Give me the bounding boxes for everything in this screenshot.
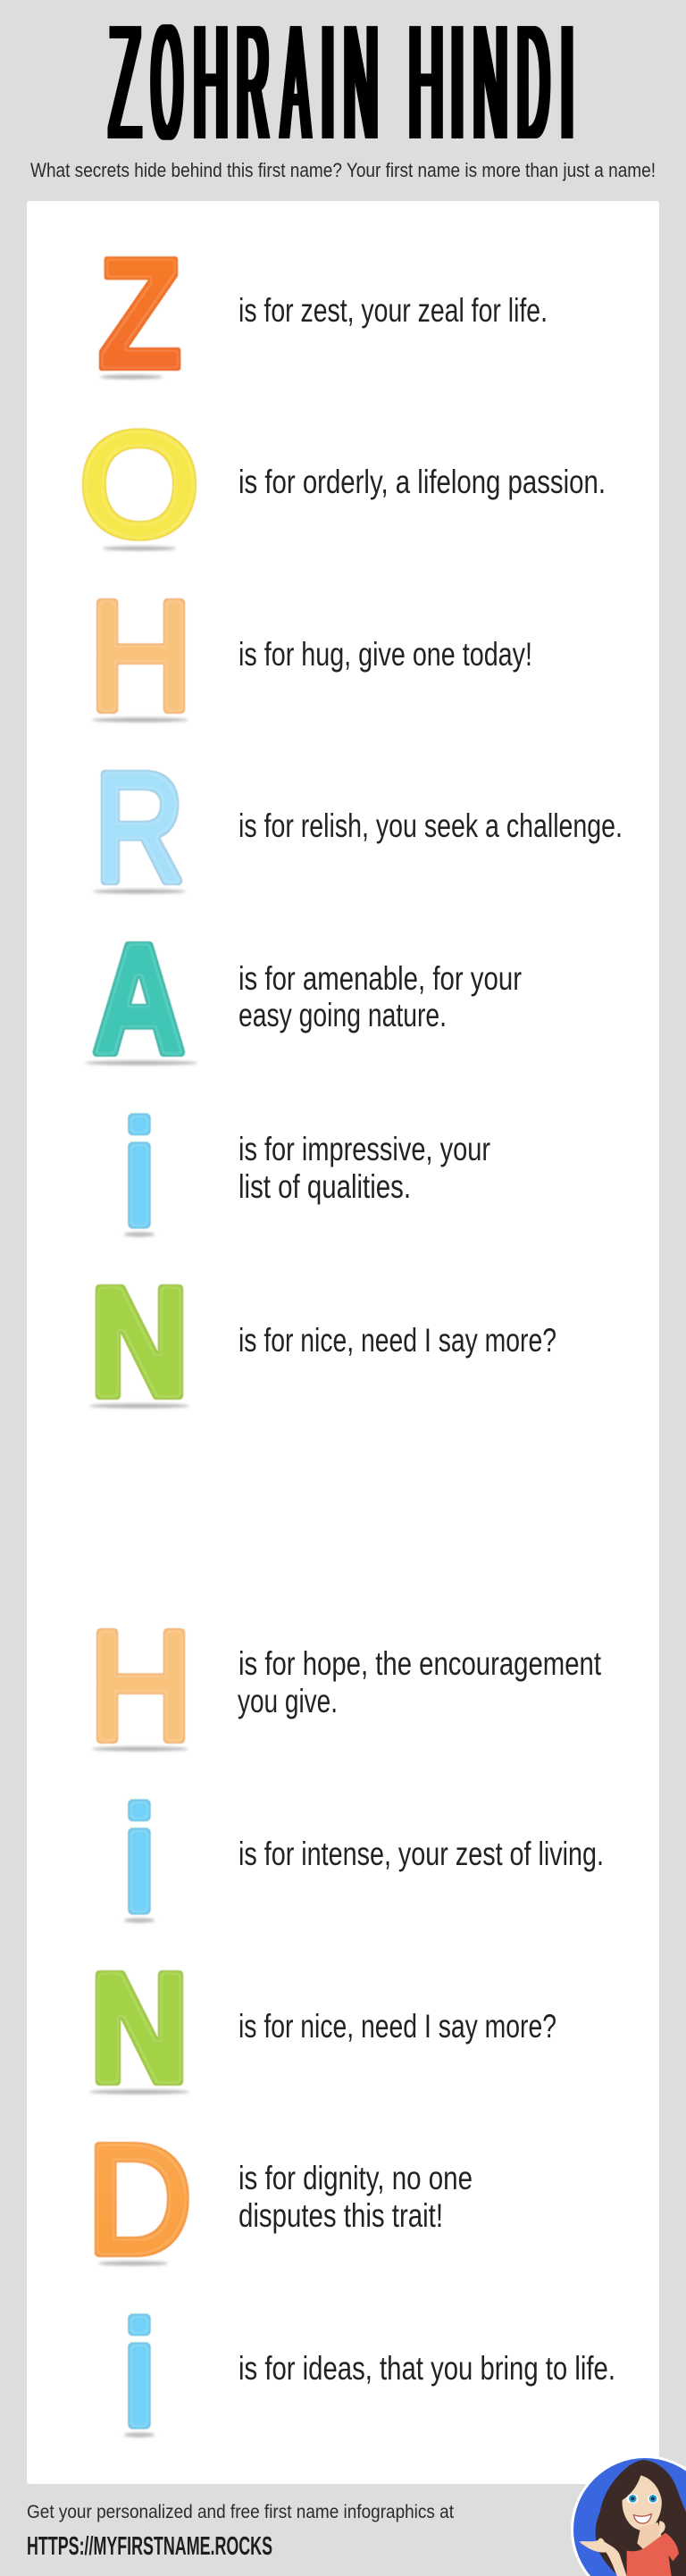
icon: shadow under N (89, 2090, 189, 2094)
row: letter i (123, 1091, 490, 1255)
icon: shadow under O (103, 547, 176, 550)
icon: shadow under H (92, 718, 188, 722)
text: D lines: is for dignity, no one (238, 2160, 473, 2196)
text: D lines (238, 2160, 473, 2234)
text: D lines: disputes this trait! (238, 2197, 443, 2234)
row: second name letter N (89, 1941, 556, 2114)
icon: shadow under R (93, 890, 186, 893)
row: second name letter H (88, 1601, 602, 1772)
icon: letter O: O (79, 403, 199, 566)
icon: letter H: H (88, 1601, 193, 1772)
icon: shadow under D (98, 2262, 168, 2265)
text: Z line: is for zest, your zeal for life. (238, 292, 548, 329)
icon: shadow under H (92, 1747, 188, 1751)
icon: shadow under A (85, 1061, 197, 1065)
icon: letter A: A (93, 913, 185, 1085)
icon: letter H: H (88, 571, 193, 742)
text: i lines: is for impressive, your (238, 1131, 490, 1167)
text: H line: is for hug, give one today! (238, 636, 532, 673)
row: second name letter i (123, 1777, 604, 1941)
row: letter R (93, 741, 623, 914)
icon: letter N: N (90, 1255, 188, 1428)
row: letter H (88, 571, 532, 742)
icon: shadow under Z (100, 375, 163, 379)
row: second name final letter i (123, 2292, 615, 2455)
text: A lines (238, 960, 522, 1033)
icon: letter i: i (123, 1777, 155, 1941)
icon: shadow under i (124, 2433, 155, 2437)
text: A lines: is for amenable, for your (238, 960, 522, 997)
text: H lines: you give. (238, 1683, 338, 1719)
icon: shadow under N (89, 1404, 189, 1408)
row: letter Z (97, 226, 548, 402)
icon: shadow under i (124, 1919, 155, 1922)
row: letter N (89, 1255, 556, 1428)
icon: letter D: D (87, 2112, 192, 2286)
text: H lines: is for hope, the encouragement (238, 1645, 602, 1682)
text: N line: is for nice, need I say more? (238, 1322, 556, 1359)
icon: letter Z: Z (97, 226, 182, 402)
row: letter O (79, 403, 606, 566)
text: N line: is for nice, need I say more? (238, 2008, 556, 2045)
text: A lines: easy going nature. (238, 997, 447, 1033)
icon: letter R: R (94, 741, 185, 914)
text: H lines (238, 1645, 602, 1719)
title (107, 0, 574, 173)
row: second name letter D (87, 2112, 473, 2286)
text: i lines (238, 1131, 490, 1205)
footer call to action: Get your personalized and free first name infographics at (27, 2502, 454, 2522)
text: i lines: list of qualities. (238, 1168, 411, 1205)
icon: letter i: i (123, 2292, 155, 2455)
row: letter A (85, 913, 522, 1085)
icon: letter N: N (90, 1941, 188, 2114)
icon: letter i: i (123, 1091, 155, 1255)
icon: avatar of woman in blue circle (571, 2455, 686, 2576)
footer url: HTTPS://MYFIRSTNAME.ROCKS (27, 2532, 272, 2561)
icon: shadow under i (124, 1233, 155, 1236)
